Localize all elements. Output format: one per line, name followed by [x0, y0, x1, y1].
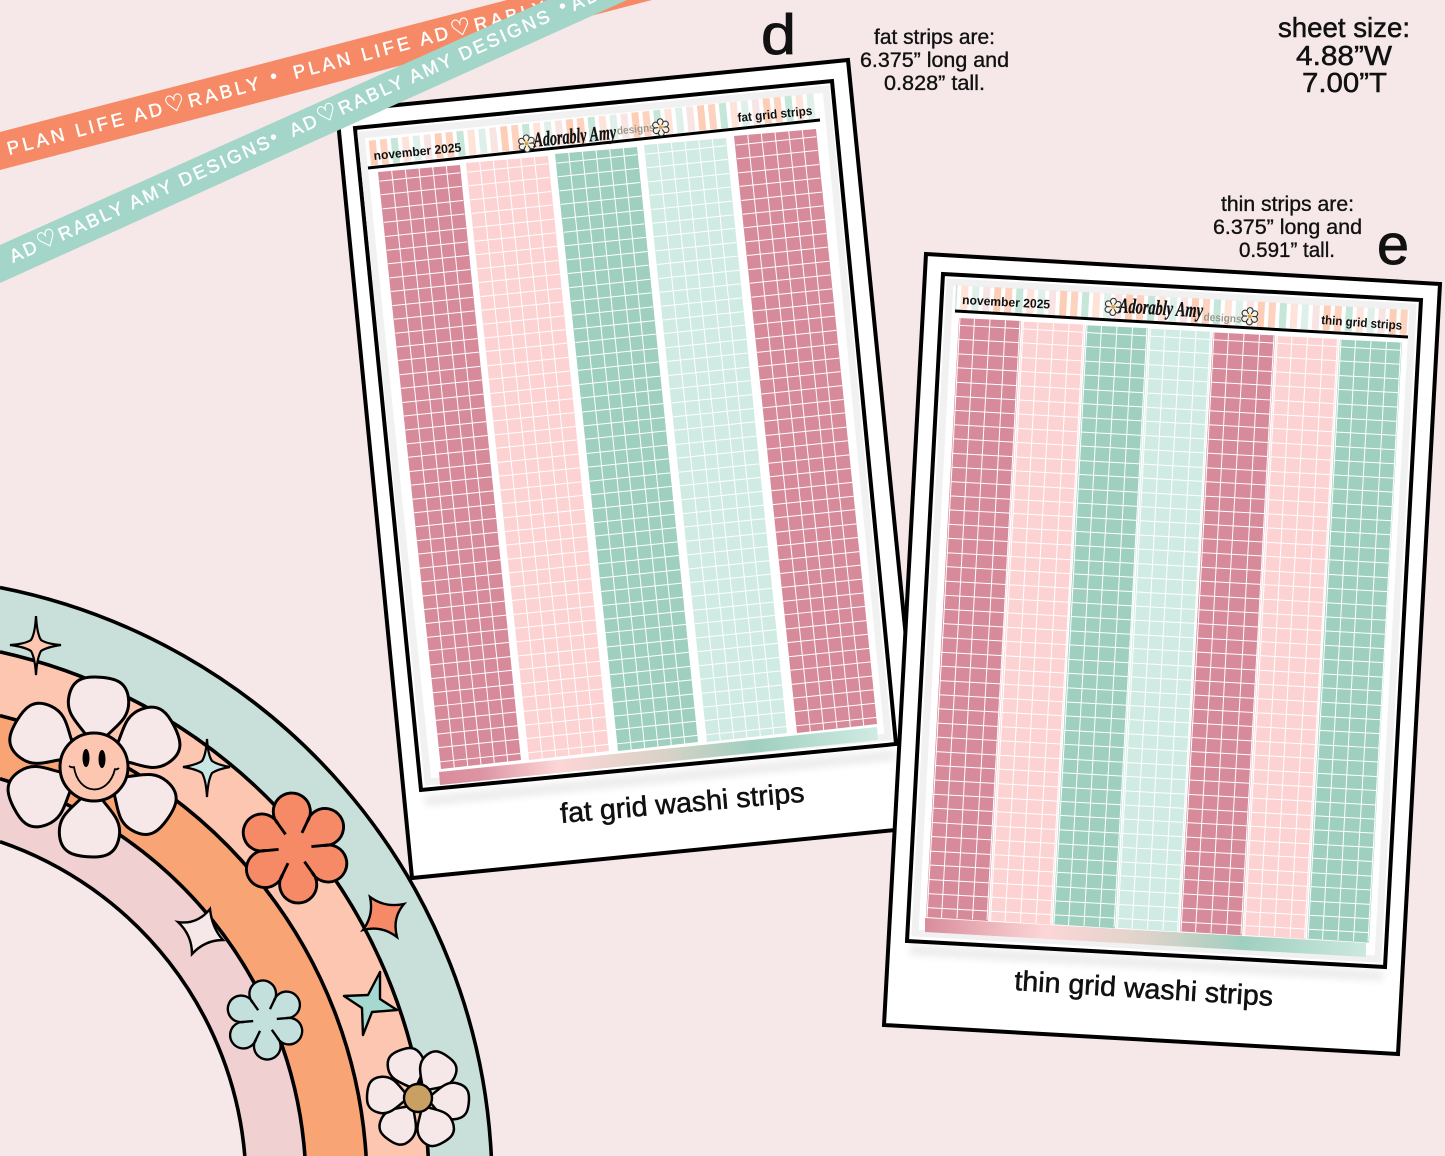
note: thin strip size: 6.375” long and	[1213, 216, 1362, 239]
note: sheet size: 7.00”T	[1302, 67, 1387, 98]
rainbow bands	[0, 588, 491, 1156]
strip: light teal	[644, 138, 787, 742]
note: fat strip size: fat strips are:	[874, 26, 995, 49]
logo: Adorably Amy designs: designs	[1203, 311, 1242, 326]
caption: thin grid washi strips	[1014, 965, 1274, 1012]
gradient band	[925, 918, 1366, 957]
label: thin grid strips: thin grid strips	[1321, 313, 1403, 333]
strip: pink	[1244, 336, 1338, 939]
ribbon separator: •	[268, 65, 279, 87]
header stripes	[366, 93, 820, 166]
strip: rose	[734, 129, 877, 733]
logo: Adorably Amy designs: Adorably Amy	[1117, 293, 1204, 322]
gradient band	[439, 727, 878, 785]
label: november 2025: november 2025	[373, 140, 462, 163]
note: thin strip size	[1213, 193, 1362, 262]
letter e: e	[1377, 213, 1409, 277]
card outline	[884, 254, 1440, 1054]
icon: teal star	[344, 972, 397, 1035]
note: sheet size: sheet size:	[1278, 12, 1410, 43]
letter d: d	[761, 3, 796, 67]
note: sheet size	[1278, 12, 1410, 98]
ribbon: teal	[0, 0, 627, 283]
strip: teal	[555, 147, 698, 751]
strips	[926, 318, 1402, 943]
header rule	[955, 311, 1408, 337]
note: sheet size: 4.88”W	[1296, 40, 1393, 71]
ribbon text repeat: AD♡RABLY AMY DESIGNS	[284, 2, 553, 142]
strip: rose	[378, 165, 521, 769]
soft shadow under frame	[425, 750, 895, 806]
strip: teal	[1307, 340, 1402, 943]
frame inner shading	[915, 282, 1413, 959]
note: thin strip size: thin strips are:	[1221, 193, 1354, 216]
card outline	[337, 60, 925, 878]
icon: orange sparkle	[363, 897, 404, 937]
strip: pink	[466, 156, 609, 760]
rainbow illustration	[0, 588, 491, 1156]
inner frame	[355, 81, 896, 790]
icon: orange flower	[240, 789, 350, 907]
note: fat strip size: 0.828” tall.	[884, 72, 985, 95]
icon: teal sparkle	[183, 739, 230, 797]
panel: fat grid washi strips card	[337, 60, 925, 878]
inner frame	[907, 274, 1421, 967]
icon: white sparkle	[178, 909, 223, 954]
label: fat grid strips: fat grid strips	[737, 104, 813, 125]
strip: teal	[1053, 325, 1148, 928]
logo: Adorably Amy designs: designs	[616, 122, 655, 138]
icon: teal flower	[226, 977, 304, 1063]
caption: fat grid washi strips	[559, 777, 806, 829]
soft shadow under frame	[910, 945, 1383, 981]
icon: peach sparkle	[10, 616, 61, 675]
ribbon: orange	[0, 0, 652, 170]
strip: rose	[926, 318, 1021, 921]
strip: pink	[990, 322, 1084, 925]
panel: thin grid washi strips card	[884, 254, 1440, 1054]
icon: white daisy	[366, 1044, 470, 1151]
ribbon separator: •	[266, 126, 281, 148]
ribbon text: AD♡RABLY AMY DESIGNS	[4, 128, 273, 268]
ribbon text: PLAN LIFE AD♡RABLY	[4, 69, 262, 160]
note: fat strip size: 6.375” long and	[860, 49, 1009, 72]
logo: Adorably Amy designs: Adorably Amy	[531, 120, 618, 152]
strips	[378, 129, 877, 769]
note: fat strip size	[860, 26, 1009, 95]
header rule	[368, 120, 820, 168]
strip: light teal	[1116, 329, 1212, 932]
label: november 2025: november 2025	[962, 293, 1050, 312]
note: thin strip size: 0.591” tall.	[1239, 239, 1335, 262]
header stripes	[955, 285, 1409, 335]
frame inner shading	[361, 89, 888, 782]
icon: smiley daisy	[0, 675, 188, 859]
strip: rose	[1180, 332, 1275, 935]
